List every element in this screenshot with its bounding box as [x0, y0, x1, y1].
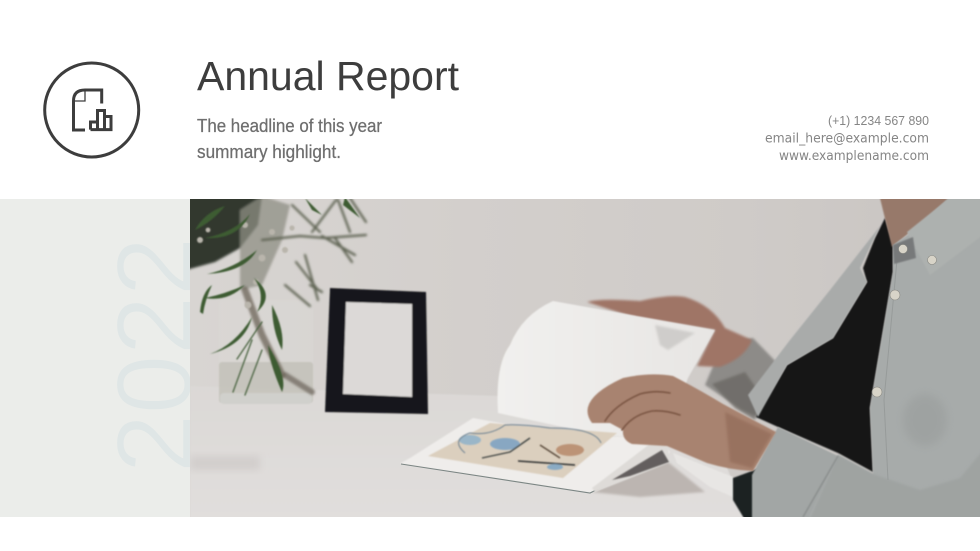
printed text on raised page: [655, 325, 695, 350]
picture frame: [325, 288, 428, 414]
sleeve folds: [813, 455, 980, 517]
open shirt flap: [748, 226, 880, 417]
wrist shading: [725, 412, 772, 468]
upper hand: [587, 296, 752, 367]
subtitle text: summary highlight.: [197, 142, 341, 162]
neck: [879, 199, 948, 248]
contact details: (+1) 1234 567 890: [828, 113, 929, 128]
blossom specks: [197, 222, 295, 308]
lower hand: [588, 374, 776, 471]
raised page: [498, 301, 715, 440]
photo: person reading a book on a desk: [186, 190, 980, 530]
blurred branches: [262, 198, 366, 306]
subtitle text: The headline of this year: [197, 116, 382, 136]
icon: report document with bar chart in circle: [45, 63, 139, 157]
watercolor painting: [459, 425, 601, 470]
black undershirt: [756, 218, 893, 472]
shirt front: [808, 199, 980, 517]
open book: [401, 301, 715, 493]
inner neck placket: [893, 237, 916, 264]
glass vase: [218, 362, 314, 404]
buttons: [872, 244, 936, 397]
page fore-edge: [592, 445, 668, 492]
lower page: [401, 418, 670, 493]
page underneath: [674, 454, 733, 495]
year watermark: 2022: [96, 237, 214, 473]
far sleeve: [705, 338, 782, 418]
desk surface: [190, 386, 748, 520]
knuckle and finger shading: [605, 392, 680, 430]
subtitle text: [197, 116, 382, 162]
plant: [186, 196, 366, 395]
black lining by the cuff: [732, 468, 756, 517]
shirt: [733, 190, 980, 530]
sharp leaves: [195, 197, 360, 392]
cuff shadow: [803, 456, 838, 517]
book cover edge: [400, 464, 596, 494]
contact details: [765, 113, 929, 164]
contact details: email_here@example.com: [765, 132, 929, 146]
fold shade: [912, 403, 938, 437]
cuff: [751, 426, 837, 517]
watercolor plate: [428, 423, 617, 478]
panel: side band: [0, 199, 191, 517]
placket seam: [884, 260, 897, 480]
dark foliage mass: [186, 196, 312, 392]
contact details: www.examplename.com: [779, 149, 929, 164]
shadow beneath book: [592, 462, 705, 497]
collar: [906, 199, 948, 234]
title: Annual Report: [197, 53, 460, 99]
